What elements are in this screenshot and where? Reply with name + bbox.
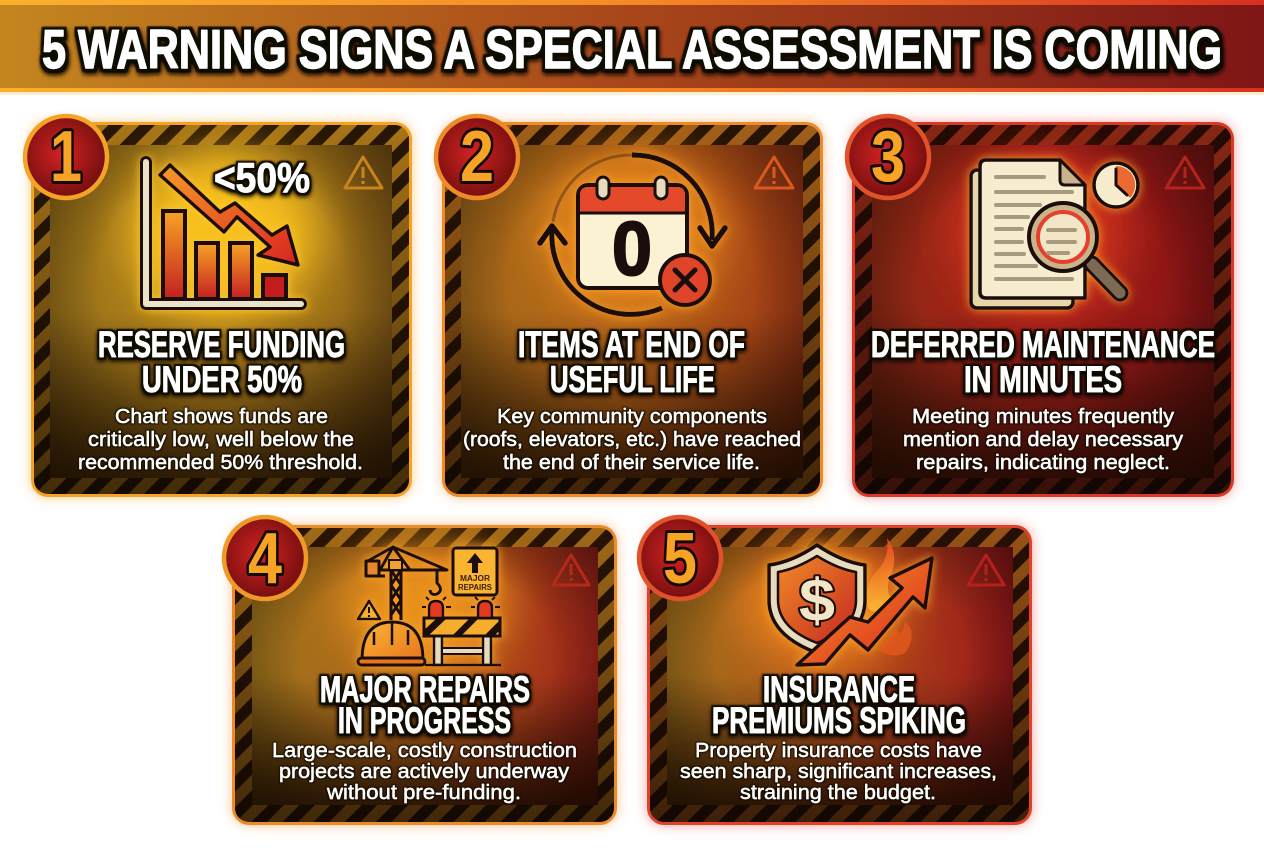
panel: card 1 reserve funding bbox=[25, 116, 412, 497]
panel: card 5 insurance premiums bbox=[639, 517, 1032, 825]
icon: warning triangle bbox=[1166, 157, 1204, 188]
card 1 heading: RESERVE FUNDING bbox=[98, 324, 345, 365]
card 5 heading bbox=[712, 669, 966, 741]
card 5 body text bbox=[680, 739, 997, 804]
icon: flames behind shield and rising arrow bbox=[866, 538, 912, 656]
card 4 heading: IN PROGRESS bbox=[338, 700, 511, 741]
number badge 2: 2 bbox=[460, 117, 494, 197]
calendar zero: 0 bbox=[612, 207, 652, 292]
number badge 3: 3 bbox=[871, 117, 905, 197]
number badge 2 bbox=[436, 116, 518, 198]
chart label: <50% bbox=[214, 154, 310, 201]
title banner bbox=[0, 0, 1264, 95]
card 4 body text: projects are actively underway bbox=[279, 760, 570, 783]
card 5 heading: INSURANCE bbox=[763, 669, 915, 710]
card 3 body text: Meeting minutes frequently bbox=[912, 405, 1175, 428]
number badge 1 bbox=[25, 116, 107, 198]
card 5 heading: PREMIUMS SPIKING bbox=[712, 700, 966, 741]
card 3 heading bbox=[871, 324, 1215, 400]
icon: warning triangle bbox=[553, 555, 589, 585]
icon: warning triangle bbox=[968, 555, 1004, 585]
card 2 body text: the end of their service life. bbox=[503, 451, 760, 474]
sign label bbox=[458, 574, 493, 592]
panel: card 2 end of useful life bbox=[436, 116, 823, 497]
icon: calendar with zero and cycle arrows bbox=[540, 155, 725, 314]
card 2 heading: USEFUL LIFE bbox=[550, 359, 715, 400]
card 1 body text: critically low, well below the bbox=[88, 428, 354, 451]
icon: warning triangle bbox=[345, 157, 382, 188]
number badge 4: 4 bbox=[248, 519, 282, 599]
panel: card 3 deferred maintenance bbox=[847, 116, 1234, 497]
dollar sign: $ bbox=[799, 567, 835, 634]
icon: documents with magnifier and clock bbox=[971, 160, 1138, 308]
card 2 heading bbox=[518, 324, 745, 400]
card 5 body text: seen sharp, significant increases, bbox=[680, 760, 997, 783]
card 1 body text bbox=[78, 405, 363, 474]
card 4 body text: Large-scale, costly construction bbox=[272, 739, 577, 762]
card 4 heading bbox=[320, 669, 530, 741]
icon: crane, helmet, barricade and sign bbox=[358, 547, 501, 665]
card 5 body text: Property insurance costs have bbox=[695, 739, 982, 762]
card 4 body text bbox=[272, 739, 577, 804]
card 3 body text bbox=[903, 405, 1184, 474]
card 2 body text bbox=[463, 405, 801, 474]
sign label: REPAIRS bbox=[458, 583, 493, 592]
number badge 4 bbox=[224, 517, 306, 599]
card 2 body text: (roofs, elevators, etc.) have reached bbox=[463, 428, 801, 451]
card 1 heading bbox=[98, 324, 345, 400]
panel: card 4 major repairs bbox=[224, 517, 617, 825]
icon: falling bar chart bbox=[146, 162, 301, 304]
card 2 body text: Key community components bbox=[497, 405, 767, 428]
card 1 body text: Chart shows funds are bbox=[115, 405, 328, 428]
number badge 5: 5 bbox=[663, 519, 697, 599]
card 3 body text: mention and delay necessary bbox=[903, 428, 1184, 451]
card 4 heading: MAJOR REPAIRS bbox=[320, 669, 530, 710]
icon: shield with dollar and rising arrow bbox=[769, 545, 932, 665]
card 1 heading: UNDER 50% bbox=[142, 359, 302, 400]
card 1 body text: recommended 50% threshold. bbox=[78, 451, 363, 474]
card 5 body text: straining the budget. bbox=[740, 781, 936, 804]
card 3 body text: repairs, indicating neglect. bbox=[916, 451, 1170, 474]
number badge 5 bbox=[639, 517, 721, 599]
card 3 heading: IN MINUTES bbox=[964, 359, 1122, 400]
sign label: MAJOR bbox=[460, 574, 490, 583]
icon: warning triangle bbox=[755, 157, 793, 188]
number badge 3 bbox=[847, 116, 929, 198]
number badge 1: 1 bbox=[50, 117, 82, 197]
card 4 body text: without pre-funding. bbox=[326, 781, 521, 804]
card 2 heading: ITEMS AT END OF bbox=[518, 324, 745, 365]
